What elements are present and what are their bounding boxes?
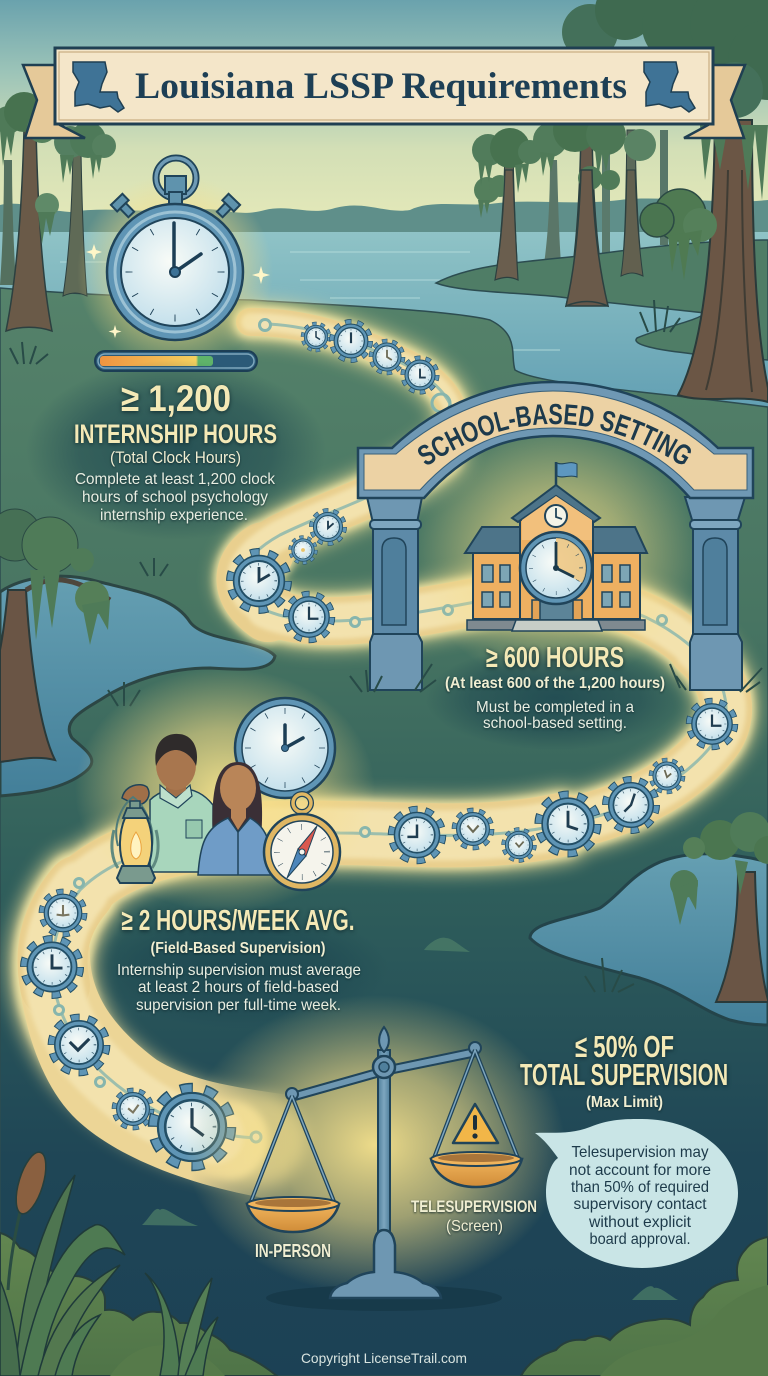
speech bubble callout: without explicit bbox=[588, 1214, 692, 1231]
background: left pond bbox=[0, 576, 275, 796]
speech bubble callout: supervisory contact bbox=[574, 1196, 707, 1213]
text block: field-based supervision: supervision per full-time week. bbox=[136, 997, 341, 1014]
base shadow bbox=[266, 1285, 502, 1311]
progress bar bbox=[95, 351, 257, 371]
banner panel bbox=[55, 48, 713, 124]
background: right island bbox=[436, 240, 768, 360]
grass patches bbox=[142, 938, 678, 1300]
text block: internship hours: (Total Clock Hours) bbox=[110, 449, 241, 467]
Louisiana icon: right bbox=[644, 62, 695, 112]
text block: internship hours: hours of school psychology bbox=[82, 489, 268, 506]
background: island trunks over shore bbox=[495, 170, 643, 306]
text block: 50 percent limit: (Max Limit) bbox=[586, 1094, 663, 1111]
text block: 600 hours: school-based setting. bbox=[483, 715, 627, 732]
banner ribbon tail: left bbox=[23, 65, 85, 138]
stat: 1,200: ≥ 1,200 bbox=[121, 378, 231, 419]
banner ribbon tail: right bbox=[684, 65, 745, 138]
background: right pond bbox=[530, 854, 768, 1025]
woman figure bbox=[198, 762, 273, 875]
school-based setting arch bbox=[356, 380, 754, 691]
clock gears along the path: left curve bbox=[25, 892, 230, 1165]
stopwatch icon bbox=[77, 158, 273, 370]
grass tufts bbox=[10, 300, 680, 992]
right pan bbox=[431, 1050, 522, 1187]
text block: internship hours bbox=[26, 360, 326, 540]
text block: 50 percent limit bbox=[520, 1029, 728, 1111]
clock gears along the path: upper bbox=[303, 322, 437, 392]
balance scale bbox=[185, 995, 565, 1311]
beam bbox=[292, 1048, 477, 1100]
title banner bbox=[23, 48, 745, 138]
arch pillar: left bbox=[367, 497, 422, 690]
text block: field-based supervision: at least 2 hours of field-based bbox=[138, 979, 339, 996]
text block: 600 hours: Must be completed in a bbox=[476, 699, 634, 716]
flag bbox=[556, 462, 577, 488]
cypress tree: large right bbox=[640, 120, 768, 402]
bush: bottom left bbox=[0, 1233, 277, 1376]
arch label bbox=[416, 424, 694, 474]
scale labels: IN-PERSON bbox=[255, 1241, 331, 1261]
text block: internship hours: internship experience. bbox=[100, 507, 248, 524]
cypress trees: upper left shore bbox=[0, 92, 116, 331]
speech bubble callout: Telesupervision may bbox=[572, 1144, 708, 1161]
text block: field-based supervision: ≥ 2 HOURS/WEEK AVG. bbox=[122, 905, 354, 937]
text block: 600 hours: (At least 600 of the 1,200 hours) bbox=[445, 675, 665, 692]
arch band bbox=[358, 382, 753, 498]
cypress tree: lower left bbox=[0, 509, 110, 762]
school building bbox=[465, 462, 647, 631]
speech bubble callout: not account for more bbox=[569, 1162, 711, 1179]
speech bubble callout: board approval. bbox=[590, 1231, 690, 1248]
clock gears along the path: S bend bbox=[231, 511, 344, 639]
scale labels: (Screen) bbox=[446, 1218, 503, 1235]
warning triangle bbox=[453, 1104, 498, 1143]
base bbox=[330, 1230, 441, 1298]
text block: field-based supervision: (Field-Based Supervision) bbox=[150, 940, 326, 957]
scale glow bbox=[185, 995, 565, 1295]
grass at arch base bbox=[350, 664, 762, 692]
copyright: Copyright LicenseTrail.com bbox=[301, 1350, 467, 1366]
field supervision illustration bbox=[75, 668, 375, 912]
cattail reeds bbox=[0, 1149, 218, 1376]
glowing path ribbon bbox=[18, 320, 726, 1202]
background: lake water bbox=[0, 232, 768, 422]
background: distant tree line bbox=[0, 199, 768, 235]
background: main ground bbox=[0, 288, 768, 1376]
speech bubble callout: than 50% of required bbox=[571, 1179, 709, 1196]
scale labels: TELESUPERVISION bbox=[411, 1197, 537, 1216]
school glow bbox=[416, 425, 696, 685]
text block: internship hours: Complete at least 1,200 clock bbox=[75, 471, 276, 488]
background: far ripples bbox=[60, 252, 660, 400]
supervisor figure bbox=[122, 734, 213, 872]
large wall clock bbox=[235, 698, 335, 798]
speech bubble callout bbox=[535, 1119, 738, 1268]
scale labels bbox=[255, 1197, 537, 1261]
post bbox=[378, 1050, 390, 1235]
background: far cypress trees bbox=[0, 108, 668, 306]
arch pillar: right bbox=[685, 497, 745, 690]
school-based setting arch: SCHOOL-BASED SETTING bbox=[418, 404, 691, 464]
text block: 600 hours: ≥ 600 HOURS bbox=[486, 642, 624, 674]
cypress tree: lower right bbox=[670, 812, 768, 1002]
tree canopy: top right bbox=[562, 0, 768, 200]
text block: internship hours: INTERNSHIP HOURS bbox=[74, 419, 277, 449]
bush: bottom right bbox=[521, 1237, 768, 1376]
left pan bbox=[247, 1096, 339, 1232]
background: sky bbox=[0, 0, 768, 240]
clock gears along the path: lower bbox=[392, 702, 734, 860]
compass bbox=[264, 794, 340, 890]
text block: 50 percent limit: ≤ 50% OF bbox=[575, 1029, 674, 1064]
text block: field-based supervision: Internship supervision must average bbox=[117, 962, 361, 979]
lantern bbox=[112, 797, 158, 883]
school clock bbox=[520, 532, 592, 604]
title text: Louisiana LSSP Requirements bbox=[135, 66, 627, 107]
Louisiana icon: left bbox=[73, 62, 124, 112]
text block: field-based supervision bbox=[88, 905, 388, 1028]
text block: 600 hours bbox=[425, 642, 685, 750]
